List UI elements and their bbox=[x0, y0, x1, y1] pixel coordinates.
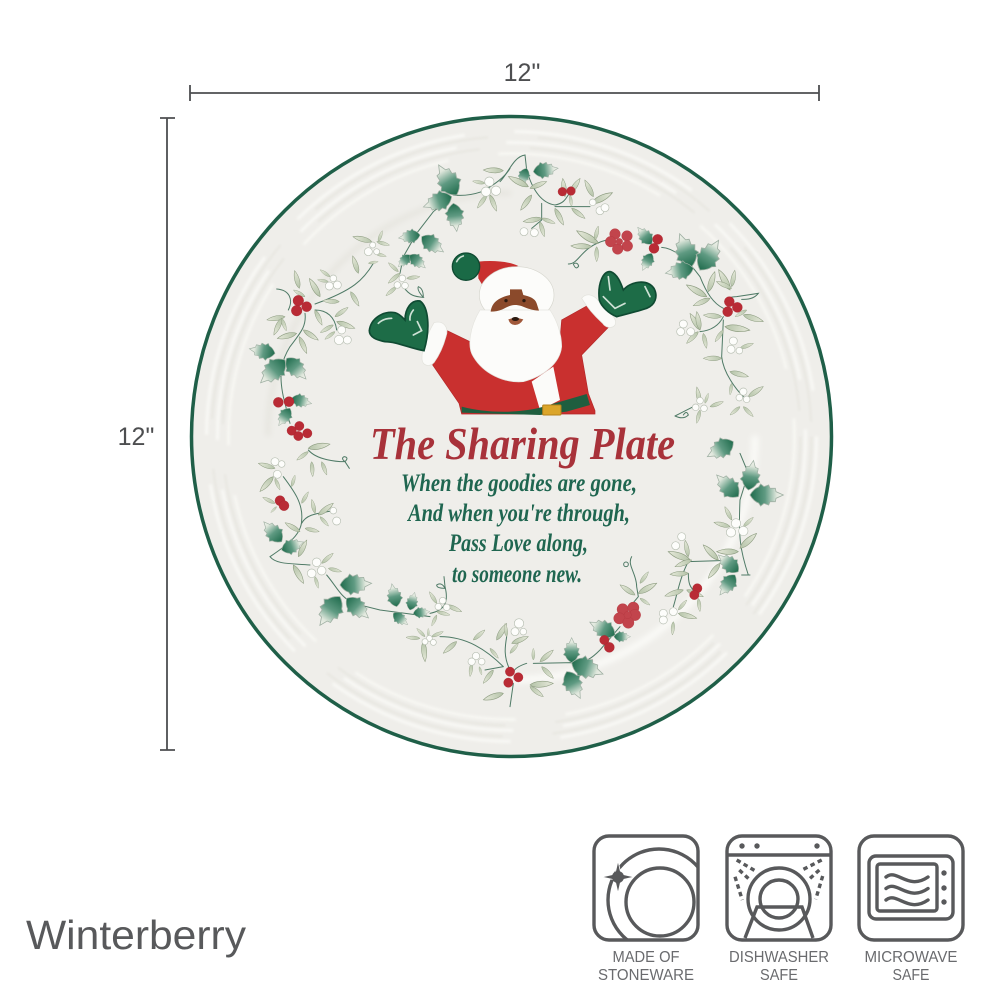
plate body with green rim bbox=[192, 116, 832, 756]
height label: 12" bbox=[118, 423, 154, 451]
label: SAFE bbox=[892, 967, 930, 984]
santa illustration bbox=[369, 253, 656, 415]
left cuff bbox=[422, 322, 447, 365]
poem bbox=[401, 470, 637, 588]
poem line 1: When the goodies are gone, bbox=[401, 470, 637, 497]
icon: dishwasher bbox=[727, 836, 831, 940]
belt bbox=[462, 394, 590, 415]
poem line 4: to someone new. bbox=[452, 561, 582, 588]
poem line 2: And when you're through, bbox=[406, 500, 630, 527]
hat pom bbox=[452, 253, 480, 280]
width label: 12" bbox=[504, 59, 540, 87]
embossed rim rings bbox=[206, 132, 816, 742]
label: MICROWAVE bbox=[864, 949, 958, 966]
product name: Winterberry bbox=[26, 912, 247, 958]
holly wreath: bottom left bbox=[257, 441, 509, 702]
belt buckle bbox=[543, 405, 561, 415]
label: DISHWASHER bbox=[729, 949, 829, 966]
plate bbox=[192, 116, 832, 756]
left mitten bbox=[369, 301, 428, 351]
red coat bbox=[433, 306, 608, 414]
holly wreath: bottom right bbox=[503, 433, 783, 707]
holly wreath: top left bbox=[248, 159, 510, 441]
height dimension line bbox=[118, 118, 175, 750]
label: STONEWARE bbox=[598, 967, 694, 984]
feature: made of stoneware bbox=[594, 836, 710, 984]
head fur bbox=[479, 267, 554, 323]
face bbox=[491, 289, 539, 312]
right mitten bbox=[599, 272, 656, 317]
label: MADE OF bbox=[612, 949, 680, 966]
label: SAFE bbox=[760, 967, 798, 984]
mouth bbox=[508, 318, 523, 325]
width dimension line bbox=[190, 59, 819, 101]
poem line 3: Pass Love along, bbox=[448, 530, 588, 557]
holly wreath: top right bbox=[500, 155, 765, 424]
beard bbox=[470, 310, 562, 382]
feature: microwave safe bbox=[859, 836, 963, 984]
icon: microwave bbox=[859, 836, 963, 940]
feature: dishwasher safe bbox=[727, 836, 831, 984]
plate title: The Sharing Plate bbox=[370, 418, 675, 469]
plate well bbox=[268, 193, 755, 680]
hat bbox=[478, 261, 518, 287]
coat front bbox=[532, 367, 560, 410]
icon: plate with sparkle bbox=[592, 834, 700, 942]
right cuff bbox=[582, 295, 616, 327]
mitten highlights bbox=[378, 277, 650, 335]
